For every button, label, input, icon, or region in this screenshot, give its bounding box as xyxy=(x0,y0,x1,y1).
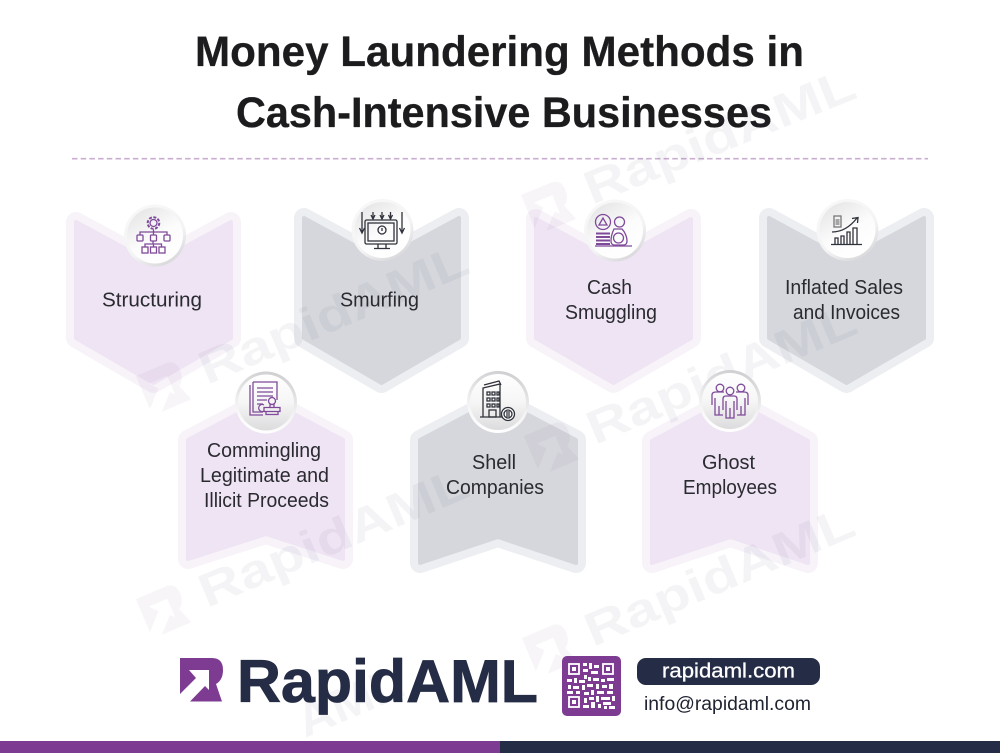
label: Commingling Legitimate and Illicit Proceeds xyxy=(200,440,329,512)
label: Cash Smuggling: Cash xyxy=(587,277,632,299)
icon: inflated sales chart xyxy=(816,199,878,261)
card: Commingling xyxy=(188,399,343,559)
email: info@rapidaml.com xyxy=(644,694,811,715)
card: Structuring xyxy=(76,222,231,383)
card: Inflated Sales and Invoices xyxy=(769,218,924,383)
label: Inflated Sales and Invoices: Inflated Sales xyxy=(785,277,903,299)
icon: cash smuggling xyxy=(584,200,646,262)
label: Shell Companies: Shell xyxy=(472,452,516,474)
watermarks: RapidAML xyxy=(576,57,863,214)
icon: shell company building xyxy=(467,371,529,433)
logo wordmark: RapidAML xyxy=(237,648,538,715)
icon: ghost employees xyxy=(699,370,761,432)
watermarks: RapidAML xyxy=(190,456,476,617)
label: Inflated Sales and Invoices: and Invoices xyxy=(793,302,900,324)
website pill: rapidaml.com xyxy=(662,660,795,682)
label: Structuring: Structuring xyxy=(102,290,202,312)
QR code xyxy=(562,656,621,716)
watermarks: AML xyxy=(288,655,410,747)
label: Ghost Employees: Employees xyxy=(683,477,777,499)
label: Smurfing: Smurfing xyxy=(340,290,419,312)
label: Commingling Legitimate and Illicit Proceeds: Commingling xyxy=(207,440,321,462)
label: Commingling Legitimate and Illicit Proceeds: Illicit Proceeds xyxy=(204,490,329,512)
logo mark xyxy=(180,658,223,702)
watermarks: RapidAML xyxy=(190,233,476,394)
card: Ghost Employees xyxy=(652,399,808,563)
card: Shell Companies xyxy=(420,399,576,563)
label: Ghost Employees xyxy=(683,452,777,499)
label: Shell Companies xyxy=(446,452,544,499)
watermarks xyxy=(133,57,864,747)
footer bar xyxy=(0,741,1000,753)
label: Cash Smuggling: Smuggling xyxy=(565,302,657,324)
label: Inflated Sales and Invoices xyxy=(785,277,903,324)
icon: structuring org chart gear xyxy=(124,204,186,266)
watermarks: RapidAML xyxy=(578,293,864,454)
watermarks: RapidAML xyxy=(576,495,862,656)
label: Shell Companies: Companies xyxy=(446,477,544,499)
icon: smurfing monitor with arrows xyxy=(352,199,414,261)
title: Cash-Intensive Businesses xyxy=(236,89,772,137)
label: Ghost Employees: Ghost xyxy=(702,452,755,474)
website pill xyxy=(637,658,820,685)
label: Commingling Legitimate and Illicit Proceeds: Legitimate and xyxy=(200,465,329,487)
card: Cash Smuggling xyxy=(536,219,691,383)
title: Money Laundering Methods in xyxy=(195,28,804,76)
title xyxy=(195,28,804,137)
card: Smurfing xyxy=(304,218,459,383)
label: Cash Smuggling xyxy=(565,277,657,324)
icon: commingling document stamp xyxy=(235,372,297,434)
